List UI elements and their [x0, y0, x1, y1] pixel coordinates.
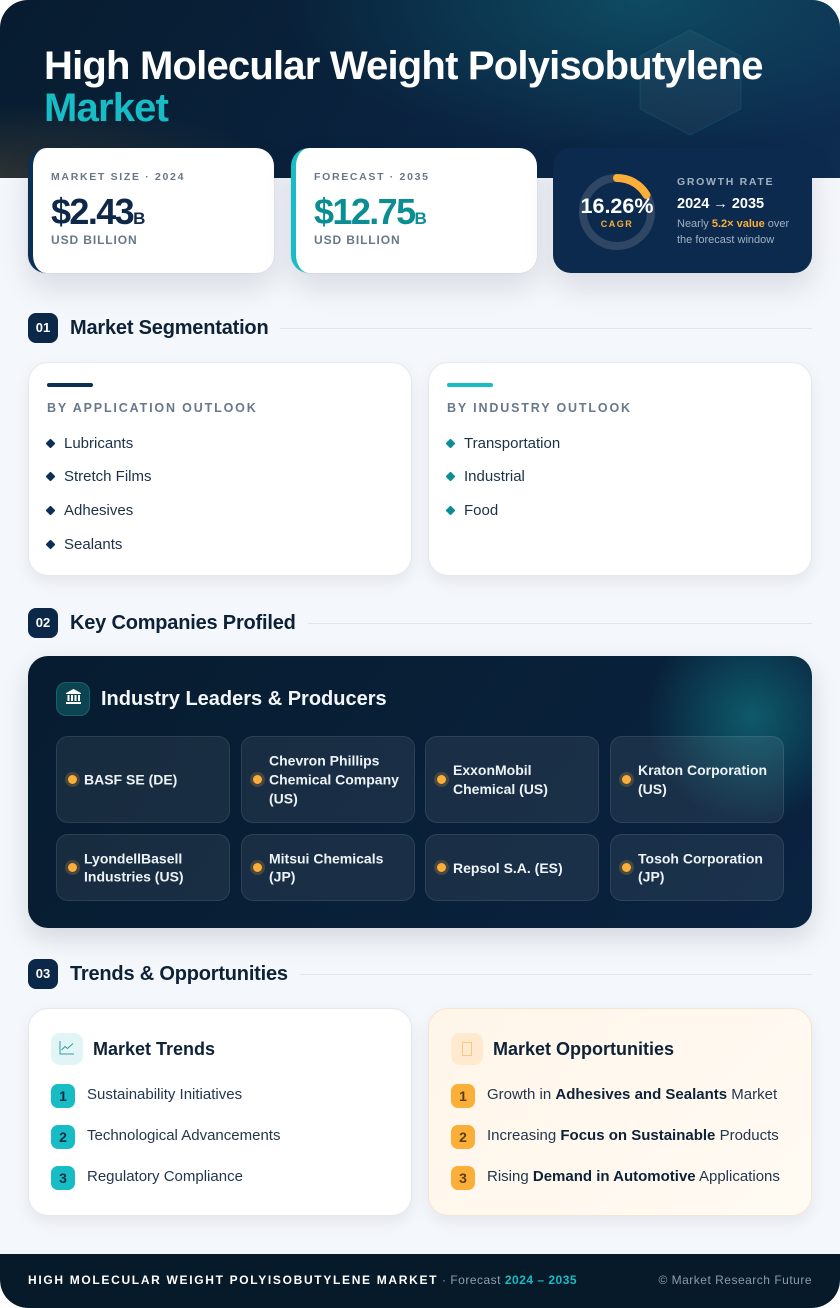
icon: decorative hexagon: [640, 30, 742, 136]
company: Kraton Corporation (US): [638, 762, 767, 796]
panel heading: Market Trends: [93, 1039, 215, 1059]
opportunity 2: Increasing Focus on Sustainable Products: [487, 1127, 779, 1144]
company: [425, 834, 599, 901]
CAGR label: CAGR: [601, 219, 633, 229]
company: Tosoh Corporation (JP): [638, 850, 763, 884]
KPI card: growth rate: [553, 148, 812, 273]
company: [425, 736, 599, 823]
list item: Lubricants: [64, 434, 133, 452]
section heading 01: Market Segmentation: [70, 317, 268, 339]
panel heading: BY APPLICATION OUTLOOK: [47, 401, 258, 415]
opportunity 3: Rising Demand in Automotive Applications: [487, 1168, 780, 1185]
panel: industry outlook: [428, 362, 812, 576]
list item: Adhesives: [64, 502, 133, 519]
opportunity 3: [451, 1166, 780, 1190]
section heading 03: Trends & Opportunities: [70, 963, 288, 985]
panel: market opportunities: [428, 1008, 812, 1216]
icon: missing glyph box: [451, 1033, 483, 1065]
icon: institution: [56, 682, 90, 716]
growth note: Nearly 5.2× value over: [677, 218, 789, 230]
growth note: [677, 218, 789, 246]
opportunity 2: 2: [459, 1129, 467, 1145]
opportunity 1: Growth in Adhesives and Sealants Market: [487, 1086, 777, 1103]
growth note: the forecast window: [677, 234, 774, 246]
trend 1: 1: [59, 1088, 67, 1104]
list item: Industrial: [464, 468, 525, 485]
growth period: 2024 → 2035: [677, 196, 764, 212]
company: [610, 834, 784, 901]
section heading 01: [28, 313, 812, 343]
trend 3: 3: [59, 1170, 67, 1186]
opportunity 2: [451, 1125, 779, 1149]
company: Chevron Phillips Chemical Company (US): [269, 752, 399, 806]
company: Mitsui Chemicals (JP): [269, 850, 383, 884]
panel: market trends: [28, 1008, 412, 1216]
KPI card: market size: $2.43B: [51, 191, 145, 232]
panel: application outlook: [28, 362, 412, 576]
KPI card: forecast: USD BILLION: [314, 233, 401, 247]
chart: CAGR donut: [579, 174, 655, 250]
company: BASF SE (DE): [84, 771, 177, 787]
opportunity 3: 3: [459, 1170, 467, 1186]
trend 2: Technological Advancements: [87, 1127, 280, 1144]
section heading 03: [28, 959, 812, 989]
company: [56, 736, 230, 823]
section heading 02: Key Companies Profiled: [70, 612, 296, 634]
panel: industry leaders: [28, 656, 812, 928]
section heading 01: 01: [36, 320, 50, 335]
trend 1: Sustainability Initiatives: [87, 1086, 242, 1103]
icon: line chart: [51, 1033, 83, 1065]
section heading 02: 02: [36, 615, 50, 630]
list item: [446, 502, 498, 519]
company: [610, 736, 784, 823]
trend 3: [51, 1166, 243, 1190]
company: [56, 834, 230, 901]
trend 1: [51, 1084, 242, 1108]
trend 3: Regulatory Compliance: [87, 1168, 243, 1185]
section heading 02: [28, 608, 812, 638]
section heading 03: 03: [36, 966, 50, 981]
trend 2: 2: [59, 1129, 67, 1145]
footer credit: © Market Research Future: [658, 1273, 812, 1287]
company: LyondellBasell Industries (US): [84, 850, 184, 884]
company: [241, 834, 415, 901]
list item: Food: [464, 502, 498, 519]
list item: Transportation: [464, 434, 560, 452]
panel heading: Market Opportunities: [493, 1039, 674, 1059]
company: ExxonMobil Chemical (US): [453, 762, 548, 796]
list item: Sealants: [64, 536, 122, 552]
footer: [0, 1254, 840, 1308]
list item: Stretch Films: [64, 468, 152, 485]
opportunity 1: 1: [459, 1088, 467, 1104]
opportunity 1: [451, 1084, 778, 1108]
KPI card: market size: [28, 148, 274, 273]
title: High Molecular Weight Polyisobutylene: [44, 44, 763, 88]
title: Market: [44, 86, 168, 130]
company: Repsol S.A. (ES): [453, 859, 563, 875]
CAGR value: 16.26%: [581, 194, 653, 218]
footer title: HIGH MOLECULAR WEIGHT POLYISOBUTYLENE MARKET · Forecast 2024 – 2035: [28, 1273, 577, 1287]
header band: [0, 0, 840, 178]
KPI card: forecast: [291, 148, 537, 273]
title: [44, 44, 763, 130]
trend 2: [51, 1125, 280, 1149]
panel heading: BY INDUSTRY OUTLOOK: [447, 401, 632, 415]
KPI card: market size: USD BILLION: [51, 233, 138, 247]
growth label: GROWTH RATE: [677, 176, 774, 188]
KPI card: forecast: $12.75B: [314, 191, 427, 232]
KPI card: forecast: FORECAST · 2035: [314, 171, 430, 183]
panel heading: Industry Leaders & Producers: [101, 688, 387, 710]
company: [241, 736, 415, 823]
KPI card: market size: MARKET SIZE · 2024: [51, 171, 185, 183]
